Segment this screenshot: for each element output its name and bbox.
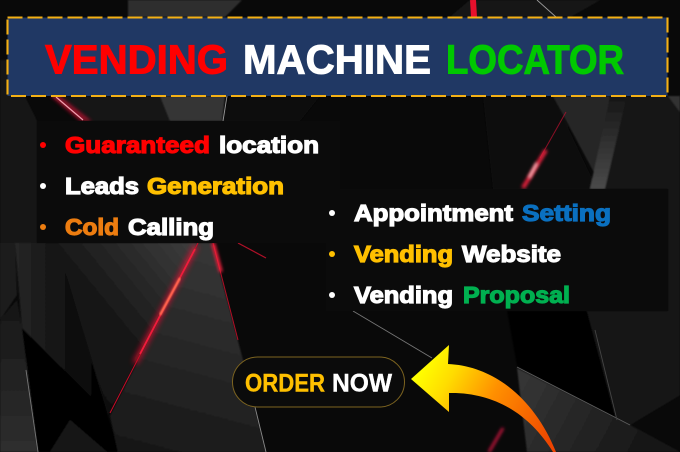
panel: left services list (37, 121, 340, 243)
list item: Appointment Setting (329, 200, 611, 226)
list item: Guaranteed location: location (219, 132, 319, 158)
title text: VENDING (45, 36, 228, 82)
list item: Cold Calling: Calling (128, 214, 214, 240)
title text (45, 36, 624, 82)
list item: Appointment Setting: Setting (522, 200, 611, 226)
red light streaks (50, 0, 566, 452)
order now button: NOW (332, 370, 392, 398)
list item: Cold Calling (40, 214, 214, 240)
list item: Leads Generation: Leads (65, 173, 139, 199)
order now button: ORDER (245, 370, 325, 398)
list item: Cold Calling: Cold (65, 214, 119, 240)
list item: Appointment Setting: Appointment (354, 200, 513, 226)
list item: Guaranteed location (40, 132, 319, 158)
list item: Vending Website: Vending (354, 241, 453, 267)
list item: Leads Generation (40, 173, 284, 199)
list item: Guaranteed location: Guaranteed (65, 132, 210, 158)
panel: right services list (326, 189, 668, 311)
title banner (8, 18, 668, 96)
list item: Vending Proposal: Vending (354, 282, 453, 308)
title text: MACHINE (243, 36, 431, 82)
list item: Vending Website (329, 241, 561, 267)
list item: Leads Generation: Generation (147, 173, 284, 199)
list item: Vending Proposal (329, 282, 570, 308)
order now button (232, 357, 404, 407)
list item: Vending Website: Website (462, 241, 561, 267)
icon: curved arrow pointing to button (411, 345, 556, 452)
list item: Vending Proposal: Proposal (463, 282, 570, 308)
title text: LOCATOR (446, 36, 624, 82)
